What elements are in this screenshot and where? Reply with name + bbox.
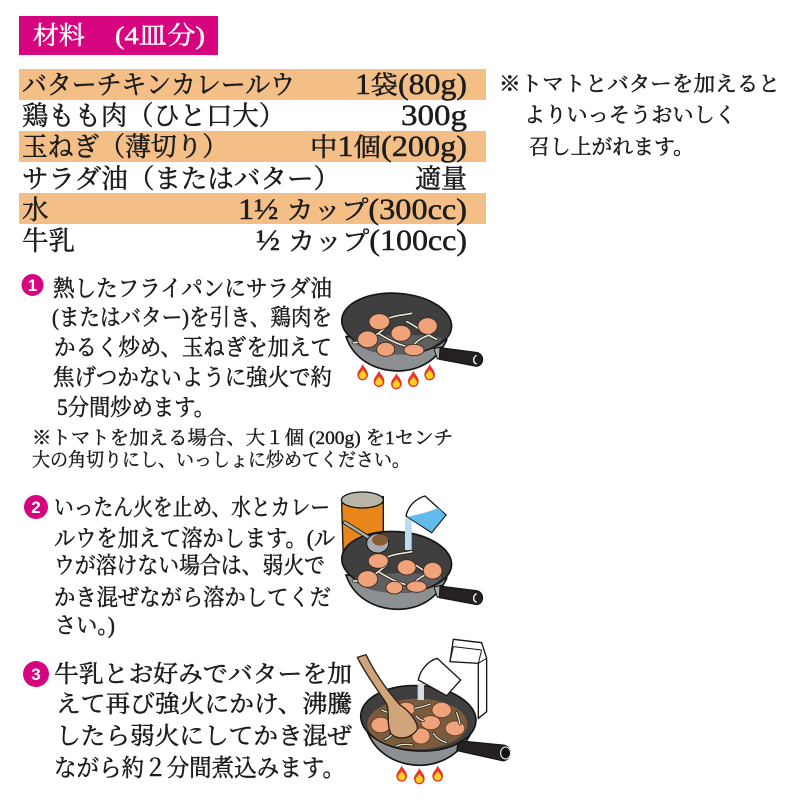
title <box>19 16 218 55</box>
title: (4皿分) <box>115 22 205 50</box>
step 2 text <box>54 495 335 638</box>
ingredient: milk: 牛乳 <box>22 226 75 256</box>
ingredient: onion: 中1個(200g) <box>310 130 467 163</box>
step 1 text: かるく炒め、玉ねぎを加えて <box>54 335 332 360</box>
step 3 text: したら弱火にしてかき混ぜ <box>56 723 352 750</box>
step 1 tomato note: 大の角切りにし、いっしょに炒めてください。 <box>32 449 410 471</box>
pan with curry <box>359 683 511 765</box>
step 2 text: かき混ぜながら溶かしてくだ <box>54 585 331 610</box>
milk carton <box>450 639 487 718</box>
step 1 text: 熱したフライパンにサラダ油 <box>53 276 332 301</box>
flames <box>396 765 443 784</box>
ingredient: onion <box>22 130 467 163</box>
step 2 text: ウが溶けない場合は、弱火で <box>54 553 325 578</box>
spoon with roux <box>345 523 389 553</box>
ingredient: curry roux: バターチキンカレールウ <box>22 70 295 100</box>
icon: milk carton, cup and curry pan <box>357 639 511 784</box>
side note: よりいっそうおいしく <box>524 103 736 127</box>
step 3 text: えて再び強火にかけ、沸騰 <box>56 691 352 718</box>
icon: roux can, spoon, water cup and pan <box>340 492 483 609</box>
ingredient: water: 1½ カップ(300cc) <box>238 193 467 226</box>
step 1 badge <box>22 274 44 296</box>
side note <box>499 72 780 159</box>
step 1 tomato note: ※トマトを加える場合、大１個 (200g) を1センチ <box>32 427 453 449</box>
step 2 text: ルウを加えて溶かします。(ル <box>54 526 335 551</box>
step 1 tomato note <box>32 427 453 471</box>
step 3 text <box>54 661 352 782</box>
water stream <box>405 518 412 550</box>
ingredient: curry roux <box>22 68 467 101</box>
ingredient: water <box>22 193 467 226</box>
ingredient: curry roux: 1袋(80g) <box>355 68 467 101</box>
step 3 text: 牛乳とお好みでバターを加 <box>54 661 352 688</box>
icon: frying pan over flames <box>340 290 483 389</box>
step 3 badge: 3 <box>31 665 41 684</box>
ingredient: oil: サラダ油（またはバター） <box>22 164 340 194</box>
ingredient: water: 水 <box>22 195 48 225</box>
ingredient: milk <box>22 224 467 257</box>
step 2 text: いったん火を止め、水とカレー <box>54 495 330 520</box>
ingredient: milk: ½ カップ(100cc) <box>256 224 467 257</box>
step 1 text: 焦げつかないように強火で約 <box>53 365 332 390</box>
step 2 text: さい。) <box>55 613 115 638</box>
milk cup <box>418 658 461 696</box>
milk stream <box>418 683 424 700</box>
side note: 召し上がれます。 <box>529 135 694 159</box>
step 2 badge: 2 <box>31 498 41 517</box>
side note: ※トマトとバターを加えると <box>499 72 780 96</box>
roux box <box>341 492 383 558</box>
step 2 badge <box>24 495 48 519</box>
panel: ingredients table <box>19 68 486 257</box>
ingredient: chicken <box>22 99 467 132</box>
step 3 text: ながら約２分間煮込みます。 <box>54 755 345 782</box>
step 1 text: (またはバター)を引き、鶏肉を <box>52 305 332 330</box>
wooden spatula <box>357 655 417 738</box>
measuring cup <box>406 496 446 533</box>
step 1 badge: 1 <box>28 276 37 295</box>
ingredient: chicken: 鶏もも肉（ひと口大） <box>22 101 285 131</box>
step 3 badge <box>23 661 49 687</box>
ingredient: chicken: 300g <box>401 99 467 132</box>
ingredient: onion: 玉ねぎ（薄切り） <box>22 132 228 162</box>
step 1 text: 5分間炒めます。 <box>57 395 215 420</box>
ingredient: oil: 適量 <box>415 164 467 194</box>
step 1 text <box>52 276 332 420</box>
title: 材料 <box>33 22 85 50</box>
